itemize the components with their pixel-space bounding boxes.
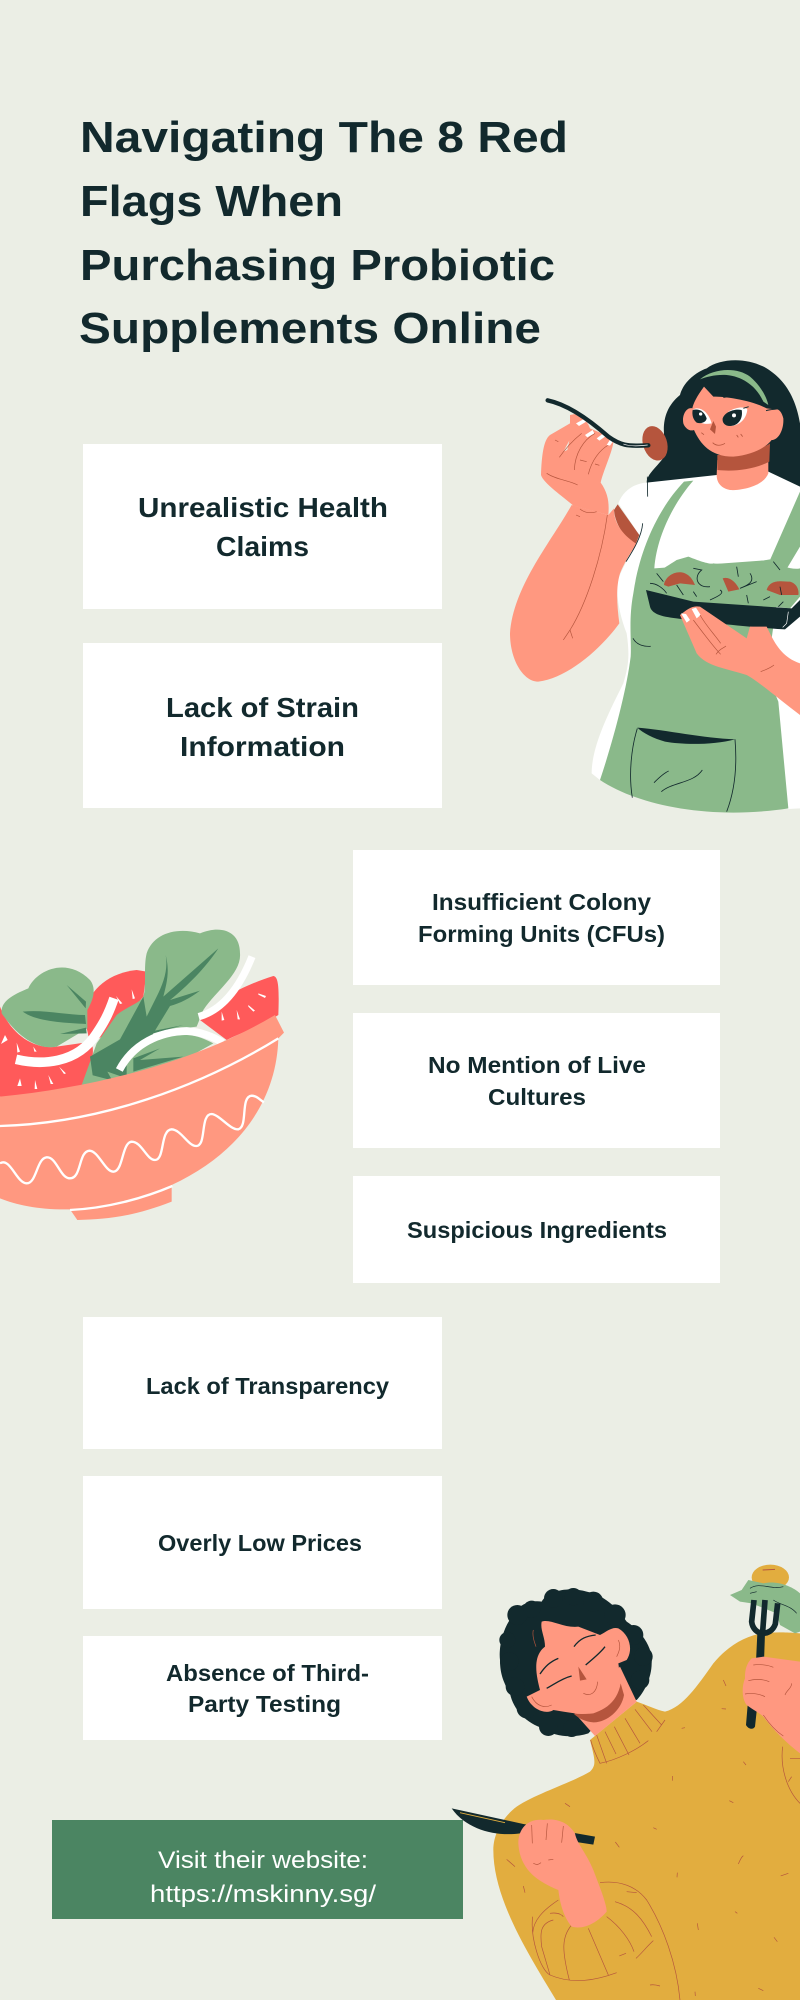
title: Navigating The 8 Red [80,113,568,162]
panel: lack of transparency [83,1317,442,1449]
title: Purchasing Probiotic [80,241,555,290]
panel: lack of strain information [83,643,442,808]
callout: website link [52,1820,463,1919]
panel: overly low prices: Overly Low Prices [158,1530,362,1556]
salad tray [646,557,800,629]
panel: suspicious ingredients: Suspicious Ingredients [407,1217,667,1243]
illustration: woman with knife and fork [452,1565,800,2000]
title: Flags When [80,177,343,226]
panel: insufficient CFUs: Forming Units (CFUs) [418,921,665,947]
illustration: salad bowl [0,930,284,1220]
hand holding knife [452,1808,607,1928]
panel: suspicious ingredients [353,1176,720,1283]
callout: website link: Visit their website: [158,1847,368,1874]
panel: unrealistic health claims: Claims [216,531,309,562]
panel: absence of third-party testing: Party Testing [188,1691,341,1717]
panel: overly low prices [83,1476,442,1609]
panel: no mention of live cultures: Cultures [488,1084,586,1110]
title [79,113,568,353]
panel: unrealistic health claims: Unrealistic Health [138,492,388,523]
illustration: woman eating salad with fork [510,360,800,813]
fork with salad [730,1565,800,1753]
panel: lack of strain information: Information [180,731,345,762]
arm and hand [510,505,637,682]
curly hair [499,1588,653,1737]
panel: lack of transparency: Lack of Transparency [146,1373,389,1399]
panel: insufficient CFUs: Insufficient Colony [432,889,651,915]
panel: insufficient CFUs [353,850,720,985]
callout: website link: https://mskinny.sg/ [150,1881,376,1908]
panel: absence of third-party testing [83,1636,442,1740]
panel: unrealistic health claims [83,444,442,609]
panel: no mention of live cultures: No Mention of Live [428,1052,646,1078]
panel: absence of third-party testing: Absence of Third- [166,1660,369,1686]
panel: no mention of live cultures [353,1013,720,1148]
fork with meatball [548,400,672,464]
title: Supplements Online [79,304,541,353]
holding hand [680,606,800,715]
eyes [692,395,779,445]
panel: lack of strain information: Lack of Strain [166,692,359,723]
